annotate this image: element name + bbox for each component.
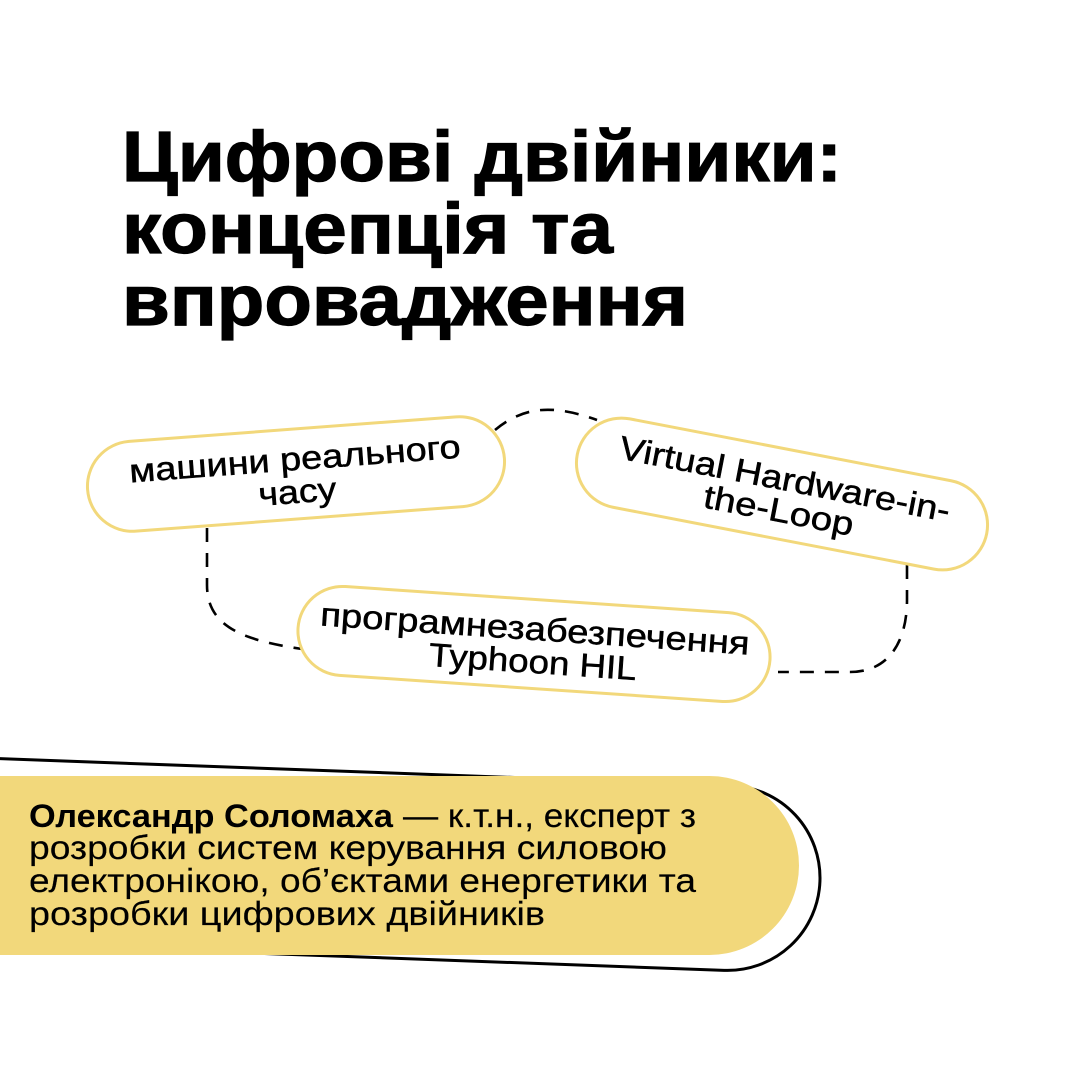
pill: real-time machines (84, 413, 508, 535)
author text: — к.т.н., експерт з (403, 797, 696, 834)
pill: real-time machines: часу (257, 470, 338, 513)
callout outline (0, 751, 823, 974)
pill: Virtual Hardware-in-the-Loop: Virtual Hardware-in- (616, 429, 953, 529)
title: Цифрові двійники: (122, 118, 842, 197)
title: концепція та (122, 190, 614, 269)
pill: Virtual Hardware-in-the-Loop: the-Loop (701, 478, 857, 543)
callout fill (0, 776, 799, 955)
pill: Typhoon HIL software: Typhoon HIL (428, 636, 638, 687)
dashed connector: left (207, 528, 302, 649)
author text: Олександр Соломаха (29, 798, 393, 834)
author text (29, 797, 697, 932)
author text: електронікою, об’єктами енергетики та (29, 862, 697, 899)
author text: розробки цифрових двійників (29, 895, 545, 932)
pill: Virtual Hardware-in-the-Loop (569, 410, 995, 578)
title: впровадження (122, 262, 688, 341)
author text: розробки систем керування силовою (29, 829, 667, 866)
dashed connector: top (495, 410, 597, 430)
title (122, 118, 842, 341)
pill: Typhoon HIL software (295, 584, 773, 704)
dashed connector: right (778, 565, 907, 672)
callout: author bio (0, 751, 823, 974)
pill: real-time machines: машини реального (128, 428, 462, 489)
pill: Typhoon HIL software: програмнезабезпечення (319, 595, 751, 662)
